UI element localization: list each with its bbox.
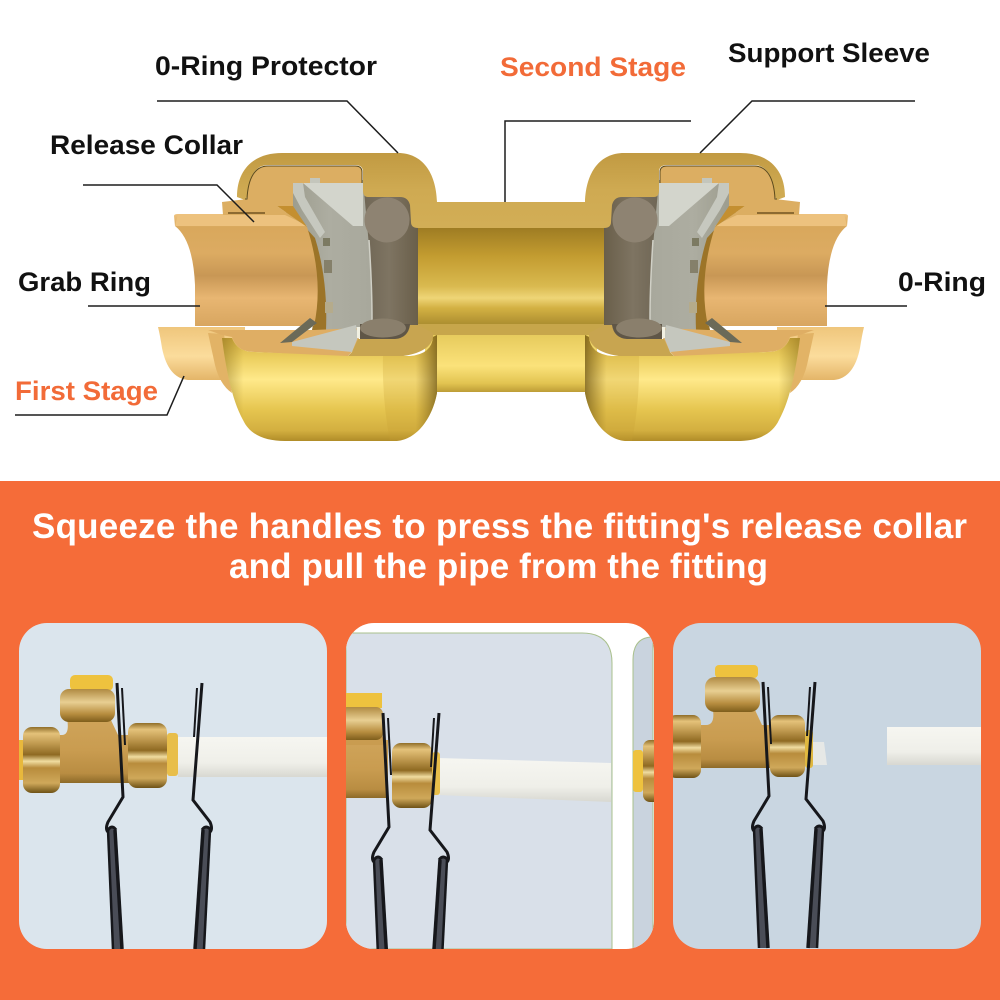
label: support sleeve: Support Sleeve [728,38,930,68]
photo: step 1, tool opened around pipe [19,623,327,949]
leader line: first stage [15,376,184,415]
label: first stage: First Stage [15,376,158,406]
leader line: grab ring [88,305,200,307]
heading: instruction text: and pull the pipe from the fitting [229,547,768,586]
panel: orange instruction band [0,481,1000,1000]
label: second stage: Second Stage [500,52,686,82]
heading: instruction text [32,507,967,586]
heading: instruction text: Squeeze the handles to press the fitting's release collar [32,507,967,546]
leader line: support sleeve [700,101,915,153]
panel: cross-section diagram [15,38,986,441]
photo: step 3, pipe pulled free [668,623,981,949]
label: O-ring: 0-Ring [898,267,986,297]
leader line: second stage [505,121,691,202]
leader line: O-ring protector [157,101,398,153]
illustration: brass fitting cutaway [158,153,864,441]
leader line: O-ring [825,305,907,307]
leader line: release collar [83,185,254,222]
label: grab ring: Grab Ring [18,267,151,297]
label: release collar: Release Collar [50,130,244,160]
label: O-ring protector: 0-Ring Protector [155,51,378,81]
photo: step 2, tool squeezed on collar [346,623,654,949]
